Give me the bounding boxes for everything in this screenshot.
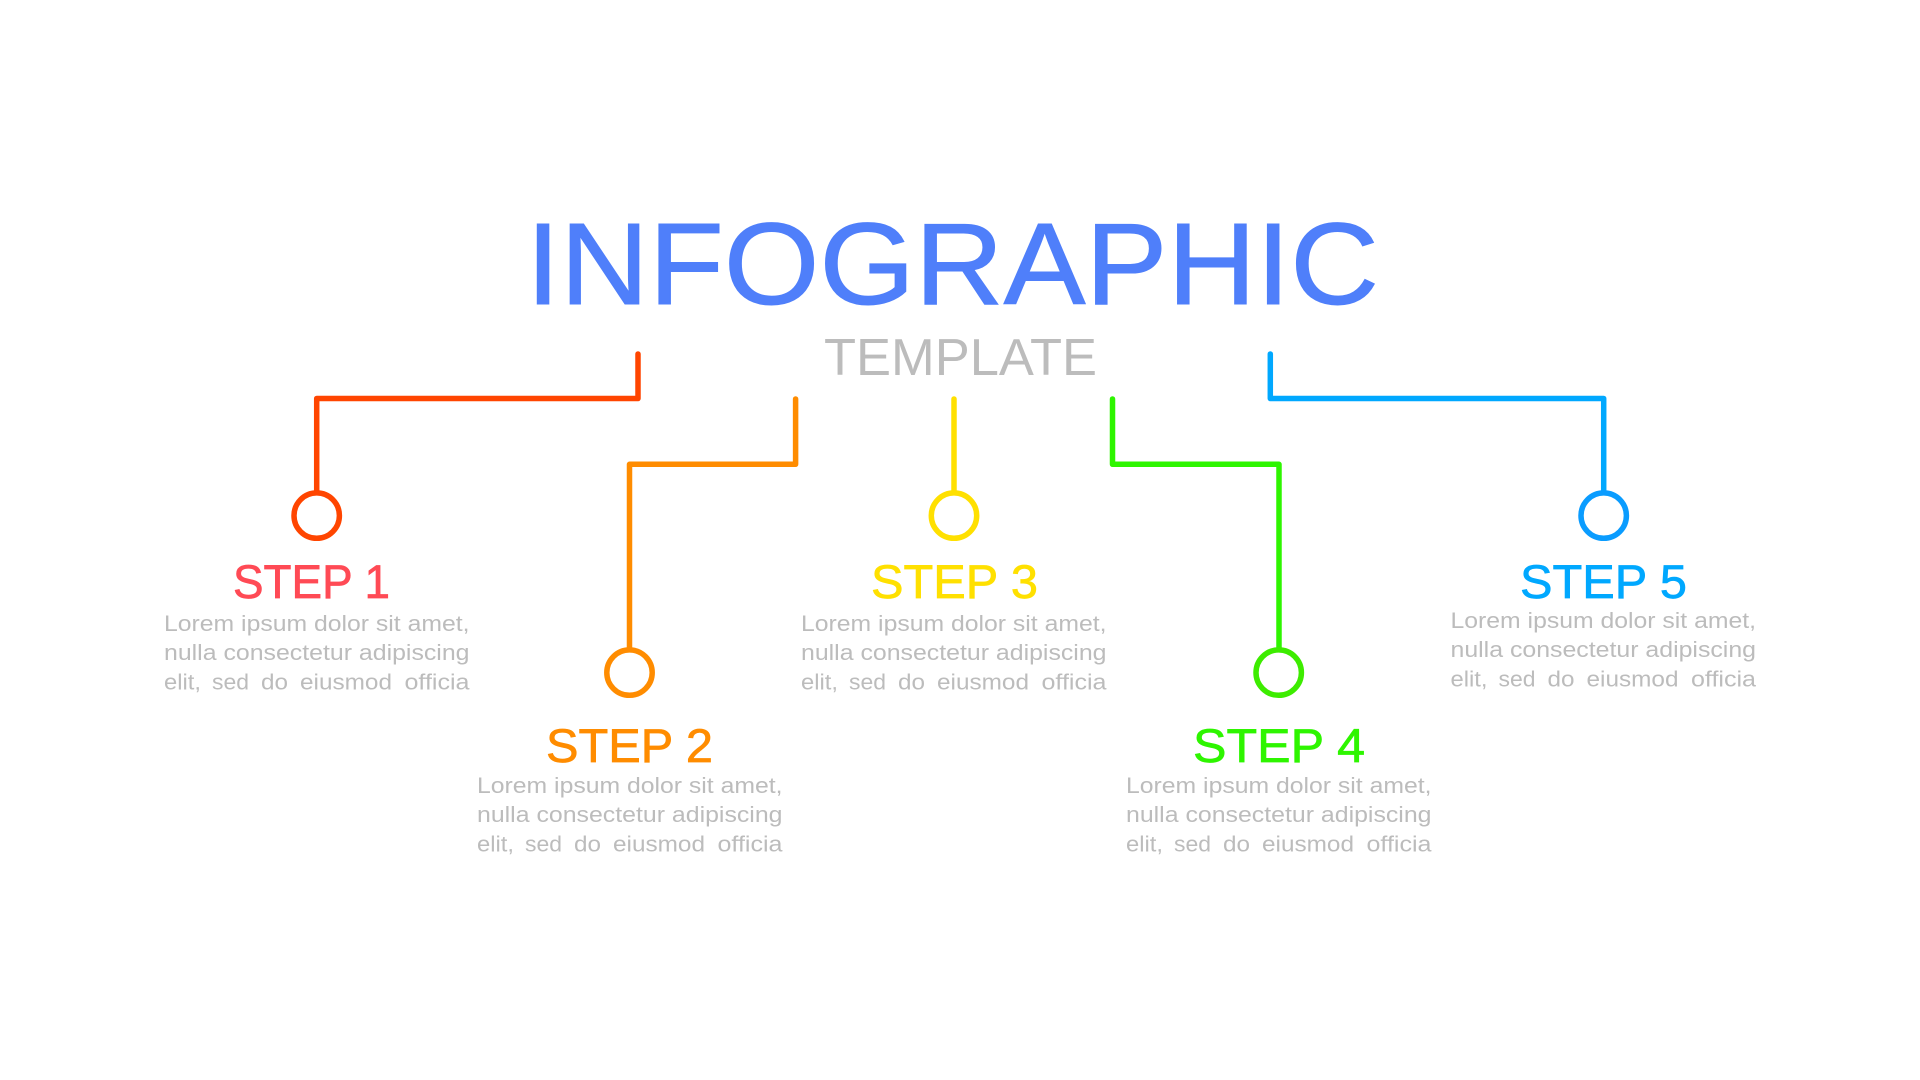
text block: step 5: nulla consectetur adipiscing xyxy=(1450,637,1756,662)
icon: step 4 circle xyxy=(1256,650,1301,695)
text block: step 5: sed xyxy=(1498,666,1536,692)
text block: step 1: do xyxy=(261,670,288,694)
icon: step 1 circle xyxy=(294,493,339,538)
text block: step 3: Lorem ipsum dolor sit amet, xyxy=(801,611,1106,636)
text block: step 3: nulla consectetur adipiscing xyxy=(801,640,1106,665)
text block: step 4 xyxy=(1126,773,1432,856)
icon: step 3 circle xyxy=(931,493,977,538)
text block: step 5: do xyxy=(1548,666,1574,692)
text block: step 4: do xyxy=(1223,832,1250,856)
text block: step 3: officia xyxy=(1042,670,1107,694)
connector: step 5 xyxy=(1270,354,1604,490)
text block: step 5: eiusmod xyxy=(1586,666,1678,692)
text block: step 5: elit, xyxy=(1450,666,1488,692)
text block: step 3: do xyxy=(898,670,925,694)
text block: step 1: nulla consectetur adipiscing xyxy=(164,640,470,665)
text block: step 3: elit, xyxy=(801,670,838,694)
text block: step 4: sed xyxy=(1174,832,1211,856)
panel: step 2 xyxy=(477,399,796,856)
panel: step 3 xyxy=(801,399,1107,694)
text block: step 1: sed xyxy=(212,670,249,694)
text block: step 2: officia xyxy=(718,832,783,856)
icon: step 2 circle xyxy=(607,650,652,695)
text block: step 2: nulla consectetur adipiscing xyxy=(477,802,782,827)
heading: step 5: STEP 5 xyxy=(1520,556,1687,609)
text block: step 1: eiusmod xyxy=(300,670,392,694)
heading: step 1: STEP 1 xyxy=(233,556,390,609)
icon: step 5 circle xyxy=(1581,493,1626,538)
heading: step 3: STEP 3 xyxy=(871,556,1038,609)
text block: step 5: Lorem ipsum dolor sit amet, xyxy=(1450,608,1756,633)
title: INFOGRAPHIC xyxy=(526,199,1379,329)
text block: step 4: eiusmod xyxy=(1262,832,1354,856)
text block: step 4: elit, xyxy=(1126,832,1163,856)
text block: step 1: Lorem ipsum dolor sit amet, xyxy=(164,611,470,636)
text block: step 5 xyxy=(1450,608,1757,692)
text block: step 2: eiusmod xyxy=(613,832,705,856)
panel: step 4 xyxy=(1112,399,1432,856)
text block: step 2: sed xyxy=(525,832,562,856)
panel: step 1 xyxy=(164,354,638,694)
subtitle: TEMPLATE xyxy=(824,329,1097,387)
text block: step 3: sed xyxy=(849,670,886,694)
panel: step 5 xyxy=(1270,354,1757,692)
text block: step 2 xyxy=(477,773,783,856)
connector: step 2 xyxy=(630,399,796,648)
text block: step 2: do xyxy=(574,832,601,856)
connector: step 1 xyxy=(317,354,638,490)
text block: step 3: eiusmod xyxy=(937,670,1029,694)
text block: step 3 xyxy=(801,611,1107,694)
heading: step 2: STEP 2 xyxy=(546,720,713,773)
text block: step 2: Lorem ipsum dolor sit amet, xyxy=(477,773,782,798)
text block: step 1: elit, xyxy=(164,670,201,694)
text block: step 5: officia xyxy=(1691,666,1757,692)
text block: step 4: Lorem ipsum dolor sit amet, xyxy=(1126,773,1432,798)
text block: step 4: nulla consectetur adipiscing xyxy=(1126,802,1432,827)
heading: step 4: STEP 4 xyxy=(1193,720,1365,773)
connector: step 4 xyxy=(1112,399,1279,648)
text block: step 1: officia xyxy=(404,670,470,694)
text block: step 1 xyxy=(164,611,470,694)
connector: step 3 xyxy=(951,399,957,490)
text block: step 4: officia xyxy=(1366,832,1432,856)
text block: step 2: elit, xyxy=(477,832,514,856)
